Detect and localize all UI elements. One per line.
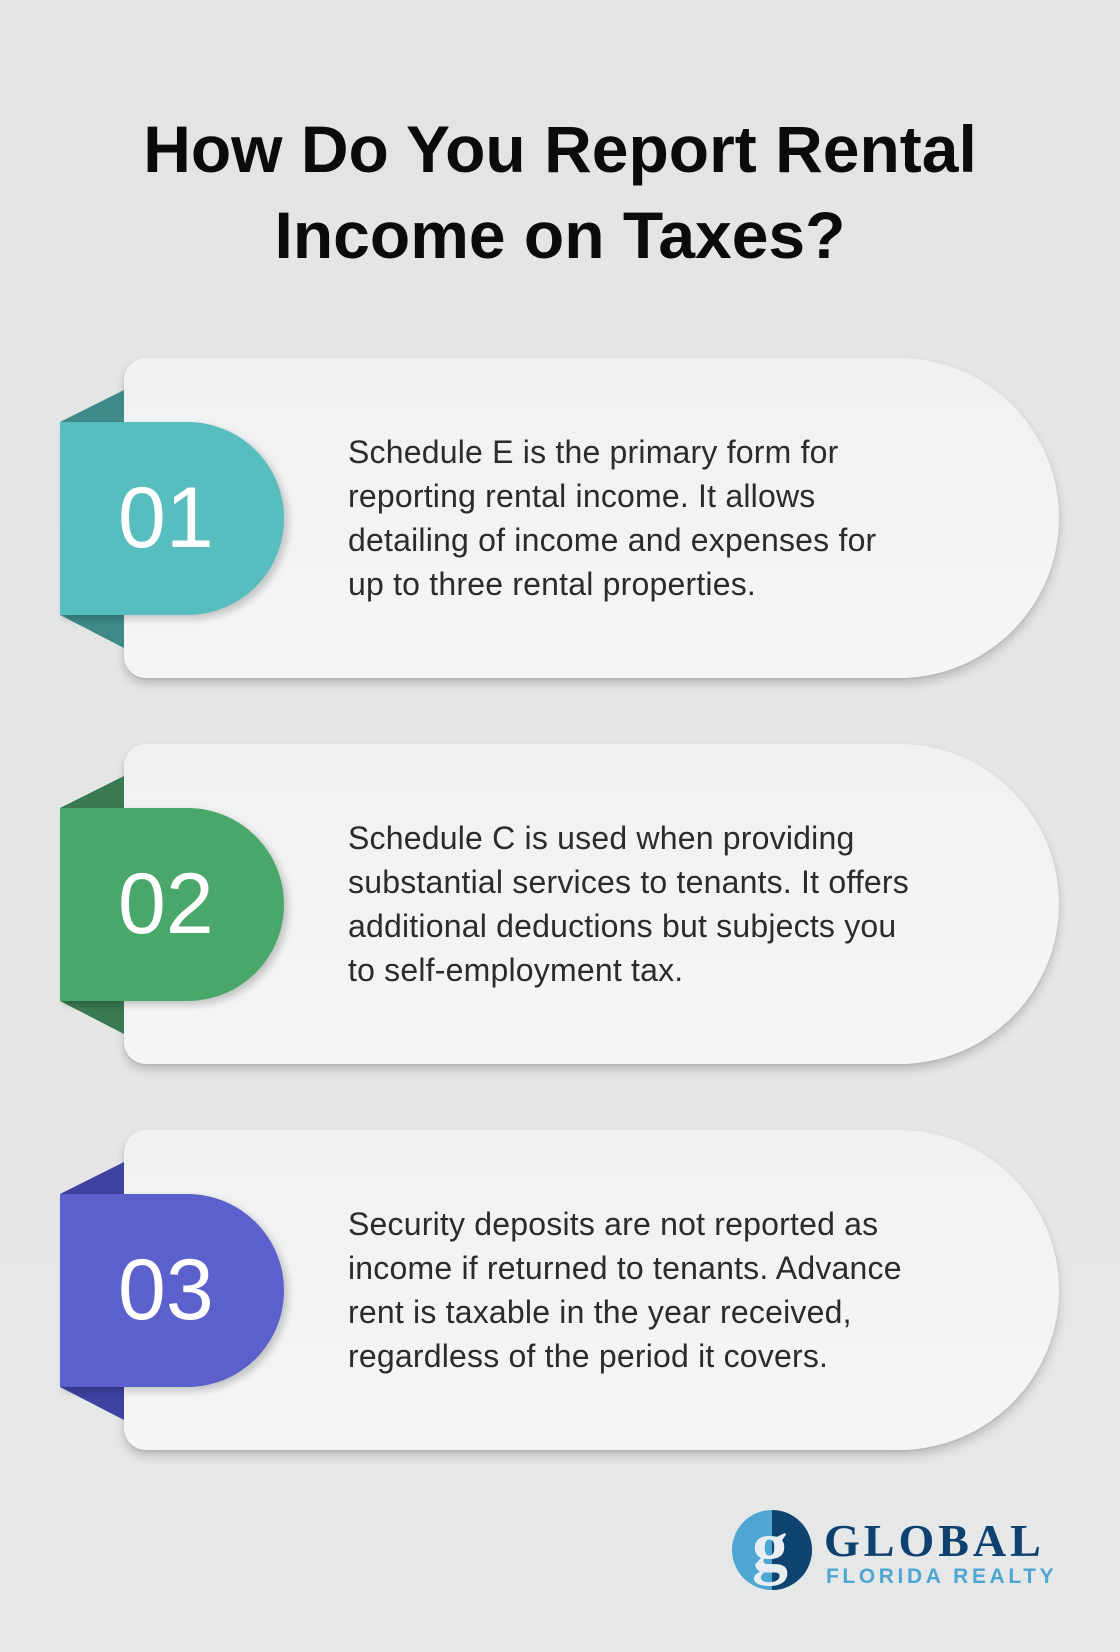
card background <box>124 358 1059 678</box>
logo text GLOBAL: GLOBAL <box>824 1515 1045 1566</box>
text: step 02: to self-employment tax. <box>348 952 683 988</box>
number tab 02 <box>60 808 284 1001</box>
text: step 02: Schedule C is used when providing <box>348 820 854 856</box>
panel: step 03 <box>60 1130 1063 1460</box>
number tab 02: 02 <box>118 856 214 952</box>
text: step 02: substantial services to tenants. It offers <box>348 864 909 900</box>
text: step 01: Schedule E is the primary form for <box>348 434 839 470</box>
icon: g circle: g <box>752 1508 788 1586</box>
text: step 03: Security deposits are not reported as <box>348 1206 878 1242</box>
text: step 01: detailing of income and expenses for <box>348 522 876 558</box>
logo <box>732 1508 1057 1590</box>
card background <box>124 1130 1059 1450</box>
text: step 01: up to three rental properties. <box>348 566 756 602</box>
text: step 02 <box>348 820 909 988</box>
number tab 01: 01 <box>118 470 214 566</box>
logo text FLORIDA REALTY: FLORIDA REALTY <box>826 1565 1057 1588</box>
title <box>143 112 977 272</box>
text: step 01: reporting rental income. It allows <box>348 478 815 514</box>
number tab 01 <box>60 422 284 615</box>
ribbon fold <box>60 1162 124 1420</box>
title: How Do You Report Rental <box>143 112 977 186</box>
card background <box>124 744 1059 1064</box>
panel: step 01 <box>60 358 1063 688</box>
text: step 03 <box>348 1206 902 1374</box>
number tab 03: 03 <box>118 1242 214 1338</box>
text: step 03: regardless of the period it covers. <box>348 1338 828 1374</box>
panel: step 02 <box>60 744 1063 1074</box>
icon: g circle <box>732 1508 812 1590</box>
text: step 01 <box>348 434 876 602</box>
title: Income on Taxes? <box>275 198 845 272</box>
text: step 03: rent is taxable in the year received, <box>348 1294 852 1330</box>
text: step 03: income if returned to tenants. Advance <box>348 1250 902 1286</box>
ribbon fold <box>60 776 124 1034</box>
text: step 02: additional deductions but subjects you <box>348 908 896 944</box>
ribbon fold <box>60 390 124 648</box>
number tab 03 <box>60 1194 284 1387</box>
